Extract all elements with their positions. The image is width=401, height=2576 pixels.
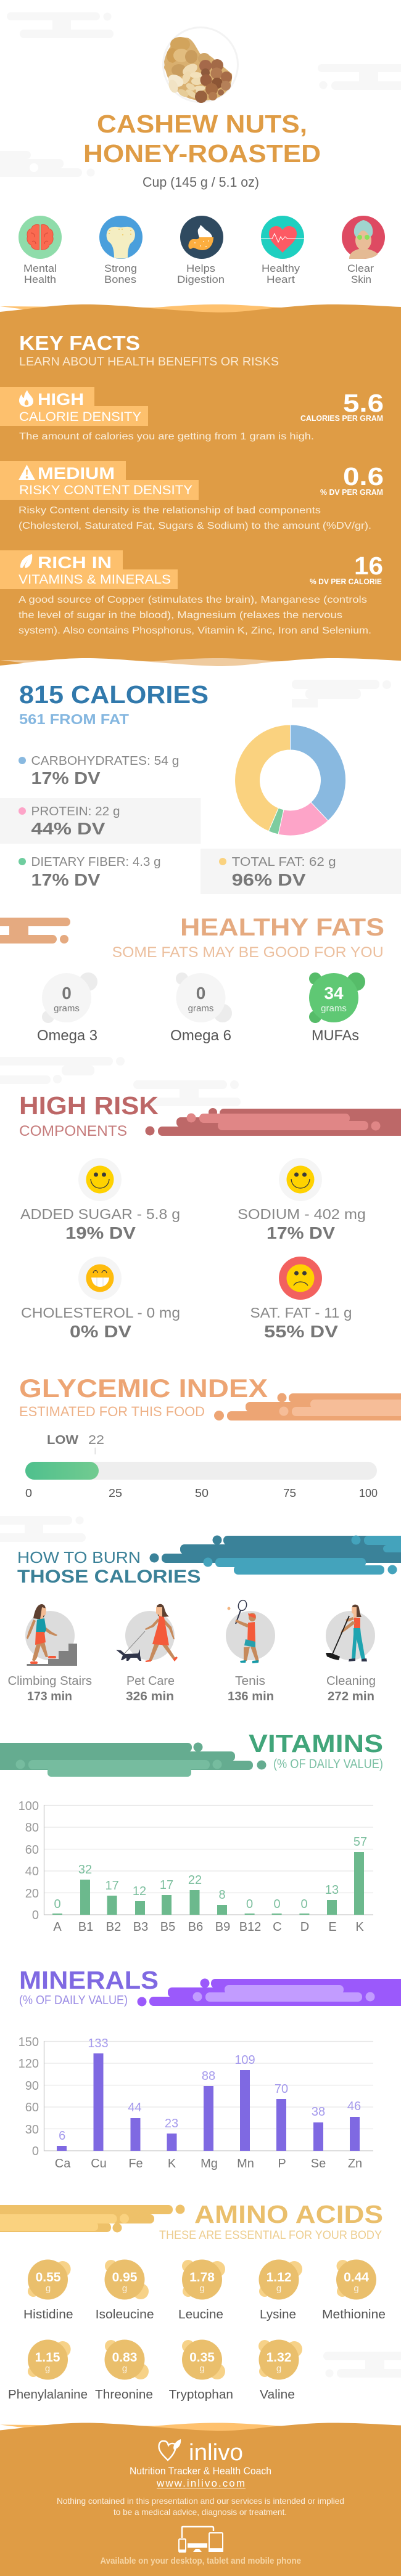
amino: histidine: 0.55 [36, 2270, 61, 2285]
bar chart: vitamins: 40 [25, 1865, 39, 1878]
mufas: MUFAs [312, 1027, 359, 1044]
bar chart: minerals: Ca [55, 2157, 71, 2170]
bar chart: minerals: 120 [19, 2057, 39, 2071]
bar chart: vitamins: 0 [246, 1897, 253, 1911]
icon: healthy heart: Healthy [262, 263, 300, 274]
bar chart: vitamins: B1 [78, 1920, 93, 1934]
decorative stripes [0, 1743, 267, 1777]
panel: amino acids [0, 2200, 386, 2402]
disclaimer: Nothing contained in this presentation and our services is intended or implied [57, 2496, 344, 2506]
decorative stripes [146, 1108, 401, 1136]
bar chart: vitamins: 57 [353, 1835, 367, 1849]
benefits row [19, 216, 385, 285]
bar chart: minerals: 44 [128, 2101, 142, 2114]
disclaimer: to be a medical advice, diagnosis or treatment. [114, 2507, 287, 2517]
activity: cleaning: 272 min [328, 1690, 374, 1703]
fact: calorie density: 5.6 [343, 389, 384, 417]
amino: lysine: g [276, 2283, 281, 2294]
title: CASHEW NUTS, [97, 110, 307, 138]
fact: rich in vitamins and minerals: RICH IN [38, 553, 112, 572]
heading: (% OF DAILY VALUE) [19, 1994, 128, 2007]
heading [19, 680, 209, 727]
amino: valine: 1.32 [267, 2350, 291, 2365]
amino: phenylalanine: 1.15 [35, 2350, 60, 2365]
heading: HEALTHY FATS [180, 914, 384, 941]
panel: how to burn those calories [7, 1536, 401, 1703]
amino: phenylalanine: g [45, 2363, 50, 2374]
activity: climbing stairs [7, 1604, 92, 1703]
glycemic scale: 100 [359, 1487, 378, 1499]
activity: tennis [226, 1599, 275, 1703]
activity: climbing stairs: 173 min [27, 1690, 72, 1703]
icon: clear skin: Skin [351, 274, 371, 285]
mufas: 34 [324, 984, 344, 1003]
tagline: Nutrition Tracker & Health Coach [130, 2465, 271, 2477]
fact: risky content density: RISKY CONTENT DENSITY [19, 483, 192, 497]
logo: inlivo [159, 2439, 243, 2466]
bar chart: vitamins: C [273, 1920, 282, 1934]
amino: leucine [178, 2259, 225, 2321]
heading [17, 1548, 200, 1587]
fact: calorie density [0, 387, 384, 442]
added sugar: ADDED SUGAR - 5.8 g [20, 1206, 180, 1222]
cholesterol: CHOLESTEROL - 0 mg [21, 1305, 180, 1321]
heading [249, 1729, 383, 1771]
decorative stripes [0, 918, 70, 944]
fact: rich in vitamins and minerals: the level of sugar in the blood), Magnesium (relaxes the nervous [19, 610, 342, 621]
glycemic scale: 75 [283, 1487, 296, 1499]
bar chart: vitamins: B9 [215, 1920, 230, 1934]
legend: total fat: TOTAL FAT: 62 g [232, 855, 336, 869]
legend: protein [0, 798, 201, 844]
legend: carbohydrates: CARBOHYDRATES: 54 g [31, 754, 179, 768]
title: HONEY-ROASTED [83, 139, 321, 168]
bar chart: vitamins: D [300, 1920, 309, 1934]
bar chart: minerals: Mn [237, 2157, 254, 2170]
heading [159, 2200, 383, 2242]
icon: clear skin [342, 216, 385, 285]
bar chart: vitamins: B6 [188, 1920, 203, 1934]
icon: healthy heart: Heart [267, 274, 295, 285]
omega 6: 0 [196, 984, 205, 1003]
bar chart: vitamins: 8 [218, 1888, 226, 1902]
fact: rich in vitamins and minerals: % DV PER CALORIE [310, 577, 382, 586]
fact: calorie density: CALORIE DENSITY [19, 410, 141, 424]
amino: threonine [95, 2339, 153, 2402]
legend: total fat [200, 849, 401, 894]
bar chart: minerals: 0 [32, 2145, 39, 2158]
bar chart: minerals: 88 [202, 2069, 215, 2083]
legend: protein: PROTEIN: 22 g [31, 805, 120, 818]
activity: pet care [116, 1604, 178, 1703]
bar chart: vitamins: 17 [160, 1878, 173, 1892]
heading: HIGH RISK [19, 1091, 159, 1120]
legend: dietary fiber [19, 855, 160, 889]
panel: glycemic index [19, 1374, 401, 1499]
amino: histidine [23, 2259, 73, 2321]
heading: COMPONENTS [19, 1123, 127, 1139]
omega 6: Omega 6 [170, 1027, 231, 1044]
sodium: 17% DV [267, 1223, 335, 1242]
amino: methionine [322, 2259, 386, 2321]
amino: tryptophan: g [199, 2363, 205, 2374]
amino: threonine: Threonine [95, 2388, 153, 2402]
decorative stripes [0, 2205, 185, 2232]
icon: mental health: Mental [23, 263, 57, 274]
panel: high risk [19, 1091, 401, 1341]
amino: isoleucine [96, 2259, 154, 2321]
bar chart: vitamins: B2 [106, 1920, 121, 1934]
icon: helps digestion: Digestion [177, 274, 225, 285]
amino: valine: g [276, 2363, 281, 2374]
heading [19, 1966, 159, 2007]
cholesterol: 0% DV [70, 1322, 131, 1341]
omega 6: grams [188, 1003, 213, 1014]
bar chart: vitamins: 0 [32, 1909, 39, 1922]
bar chart: vitamins: B5 [160, 1920, 175, 1934]
heading: (% OF DAILY VALUE) [273, 1757, 383, 1771]
heading [19, 332, 279, 369]
heading: GLYCEMIC INDEX [19, 1374, 268, 1403]
icon: leaf [20, 554, 32, 568]
bar chart: minerals: Zn [348, 2157, 362, 2170]
panel: minerals [19, 1966, 401, 2170]
heading: 561 FROM FAT [19, 711, 129, 727]
logo: inlivo: inlivo [189, 2440, 243, 2466]
bar chart: minerals: K [168, 2157, 176, 2170]
fact: risky content density: (Cholesterol, Saturated Fat, Sugars & Sodium) to the amount (%DV/gr). [19, 521, 371, 531]
amino: isoleucine: g [122, 2283, 127, 2294]
fact: rich in vitamins and minerals: A good source of Copper (stimulates the brain), Manganese (controls [19, 595, 367, 605]
bar chart: vitamins: 0 [273, 1897, 281, 1911]
bar chart: minerals: 109 [234, 2053, 255, 2067]
sodium [238, 1158, 366, 1242]
fact: rich in vitamins and minerals [0, 550, 383, 636]
fact: rich in vitamins and minerals: system). Also contains Phosphorus, Vitamin K, Zinc, Iron and Selenium. [19, 626, 371, 636]
bar chart: vitamins: A [53, 1920, 62, 1934]
fact: risky content density [0, 461, 384, 531]
icon: helps digestion: Helps [186, 263, 215, 274]
icon: warning triangle [19, 465, 35, 480]
saturated fat: SAT. FAT - 11 g [250, 1305, 352, 1321]
amino: valine: Valine [260, 2388, 295, 2402]
fact: risky content density: % DV PER GRAM [320, 487, 383, 497]
saturated fat [250, 1257, 352, 1341]
amino: histidine: Histidine [23, 2308, 73, 2321]
icon: strong bones: Strong [104, 263, 137, 274]
amino: lysine: Lysine [260, 2308, 296, 2321]
bar chart: vitamins: K [355, 1920, 364, 1934]
icon: healthy heart [261, 216, 304, 285]
decorative stripes [214, 1393, 401, 1420]
activity: cleaning: Cleaning [326, 1674, 376, 1688]
omega 3 [37, 972, 97, 1044]
food photo: mixed nuts [163, 27, 238, 103]
fact: risky content density: Risky Content density is the relationship of bad components [19, 505, 321, 516]
amino: threonine: g [122, 2363, 127, 2374]
heading: AMINO ACIDS [194, 2200, 383, 2228]
bar chart: minerals: Cu [91, 2157, 107, 2170]
bar chart: minerals: 30 [25, 2123, 39, 2137]
mufas [309, 972, 365, 1044]
panel: healthy fats [0, 914, 384, 1044]
bar chart: minerals [19, 2036, 373, 2170]
fact: calorie density: CALORIES PER GRAM [300, 414, 383, 423]
heading: ESTIMATED FOR THIS FOOD [19, 1404, 205, 1419]
bar chart: minerals: 6 [59, 2129, 65, 2143]
omega 3: grams [54, 1003, 80, 1014]
bar chart: vitamins: 60 [25, 1843, 39, 1857]
added sugar: 19% DV [65, 1223, 136, 1242]
legend: carbohydrates [19, 754, 179, 788]
bar chart: vitamins: 22 [188, 1873, 202, 1887]
fact: calorie density: HIGH [38, 390, 84, 409]
activity: tennis: Tenis [235, 1674, 265, 1688]
amino: leucine: g [199, 2283, 205, 2294]
glycemic scale: 0 [25, 1487, 32, 1499]
panel: calories [0, 680, 401, 894]
bar chart: minerals: 46 [347, 2100, 361, 2113]
amino: leucine: Leucine [178, 2308, 223, 2321]
amino: valine [258, 2339, 302, 2402]
icon: flame [19, 390, 33, 407]
cholesterol [21, 1257, 180, 1341]
bar chart: minerals: P [278, 2157, 286, 2170]
heading [112, 914, 384, 961]
fact: risky content density: 0.6 [343, 462, 384, 491]
amino: threonine: 0.83 [112, 2350, 137, 2365]
fact: calorie density: The amount of calories you are getting from 1 gram is high. [19, 431, 314, 442]
bar chart: vitamins: 17 [105, 1879, 119, 1893]
legend: protein: 44% DV [31, 819, 105, 838]
bar chart: minerals: Se [311, 2157, 326, 2170]
mufas: grams [321, 1003, 347, 1014]
amino: phenylalanine: Phenylalanine [8, 2388, 88, 2402]
legend: dietary fiber: DIETARY FIBER: 4.3 g [31, 855, 160, 869]
bar chart: vitamins: 100 [19, 1800, 39, 1813]
glycemic bar [25, 1462, 377, 1480]
bar chart: vitamins: E [328, 1920, 337, 1934]
amino: methionine: g [353, 2283, 359, 2294]
panel: key facts [0, 304, 401, 678]
sodium: SODIUM - 402 mg [238, 1206, 366, 1222]
activity: tennis: 136 min [228, 1690, 274, 1703]
amino: tryptophan: 0.35 [189, 2350, 215, 2365]
bar chart: vitamins: B12 [239, 1920, 261, 1934]
omega 6 [170, 972, 232, 1044]
bar chart: minerals: 150 [19, 2036, 39, 2049]
heading: THOSE CALORIES [17, 1567, 200, 1587]
added sugar [20, 1158, 180, 1242]
amino: methionine: 0.44 [344, 2270, 369, 2285]
icon: mental health: Health [24, 274, 56, 285]
icon: mental health [19, 216, 62, 285]
icon: strong bones: Bones [104, 274, 136, 285]
heading: SOME FATS MAY BE GOOD FOR YOU [112, 944, 384, 961]
bar chart: vitamins: 12 [133, 1885, 146, 1898]
icon: helps digestion [177, 216, 225, 285]
bar chart: vitamins [19, 1800, 373, 1934]
bar chart: minerals: Fe [128, 2157, 143, 2170]
amino: lysine [259, 2259, 302, 2321]
glycemic scale [25, 1487, 378, 1499]
omega 3: 0 [62, 984, 72, 1003]
activity: cleaning [326, 1605, 376, 1703]
amino: methionine: Methionine [322, 2308, 386, 2321]
legend: total fat: 96% DV [232, 870, 306, 889]
bar chart: minerals: 23 [165, 2117, 178, 2130]
amino: tryptophan [169, 2339, 233, 2402]
amino: isoleucine: 0.95 [112, 2270, 138, 2285]
bar chart: minerals: 90 [25, 2079, 39, 2093]
heading: HOW TO BURN [17, 1548, 141, 1567]
amino: leucine: 1.78 [189, 2270, 215, 2285]
serving size: Cup (145 g / 5.1 oz) [143, 174, 259, 190]
panel: vitamins [0, 1729, 383, 1934]
bar chart: minerals: 38 [312, 2105, 325, 2119]
donut chart [235, 725, 345, 836]
bar chart: vitamins: 20 [25, 1887, 39, 1901]
icon: devices [179, 2527, 223, 2553]
bar chart: minerals: 133 [88, 2037, 109, 2050]
bar chart: minerals: 60 [25, 2101, 39, 2114]
amino: histidine: g [46, 2283, 51, 2294]
bar chart: vitamins: 32 [78, 1863, 92, 1877]
glycemic value: 22 [88, 1433, 104, 1447]
icon: clear skin: Clear [347, 263, 374, 274]
heading: KEY FACTS [19, 332, 140, 354]
legend: dietary fiber: 17% DV [31, 870, 101, 889]
bar chart: vitamins: 80 [25, 1821, 39, 1835]
panel: footer [0, 2423, 401, 2576]
bar chart: minerals: Mg [200, 2157, 218, 2170]
heading: LEARN ABOUT HEALTH BENEFITS OR RISKS [19, 356, 279, 369]
availability note: Available on your desktop, tablet and mobile phone [100, 2556, 301, 2566]
bar chart: minerals: 70 [275, 2082, 288, 2096]
saturated fat: 55% DV [264, 1322, 338, 1341]
heading [19, 1091, 159, 1139]
disclaimer [57, 2496, 344, 2517]
glycemic scale: 25 [109, 1487, 122, 1499]
decorative stripes [137, 1978, 401, 2007]
amino: phenylalanine [8, 2339, 88, 2402]
amino: lysine: 1.12 [267, 2270, 291, 2285]
fact: rich in vitamins and minerals: VITAMINS & MINERALS [19, 573, 171, 587]
bar chart: vitamins: 0 [300, 1897, 308, 1911]
legend: carbohydrates: 17% DV [31, 768, 101, 788]
icon: strong bones [99, 216, 143, 285]
glycemic value [47, 1433, 104, 1454]
bar chart: vitamins: B3 [133, 1920, 148, 1934]
amino: tryptophan: Tryptophan [169, 2388, 233, 2402]
bar chart: vitamins: 13 [325, 1883, 339, 1897]
fact: rich in vitamins and minerals: 16 [354, 552, 383, 580]
heading: 815 CALORIES [19, 680, 209, 709]
amino: isoleucine: Isoleucine [96, 2308, 154, 2321]
heading: VITAMINS [249, 1729, 383, 1758]
activity: climbing stairs: Climbing Stairs [7, 1674, 92, 1688]
heading: MINERALS [19, 1966, 159, 1994]
heading [19, 1374, 268, 1419]
activity: pet care: 326 min [126, 1690, 174, 1703]
glycemic scale: 50 [195, 1487, 209, 1499]
website link: www.inlivo.com [156, 2477, 245, 2489]
decorative stripes [149, 1536, 401, 1575]
activity: pet care: Pet Care [126, 1674, 175, 1688]
bar chart: vitamins: 0 [54, 1897, 61, 1911]
glycemic value: LOW [47, 1433, 78, 1447]
title [83, 110, 321, 168]
omega 3: Omega 3 [37, 1027, 97, 1044]
fact: risky content density: MEDIUM [38, 464, 115, 483]
heading: THESE ARE ESSENTIAL FOR YOUR BODY [159, 2229, 382, 2242]
